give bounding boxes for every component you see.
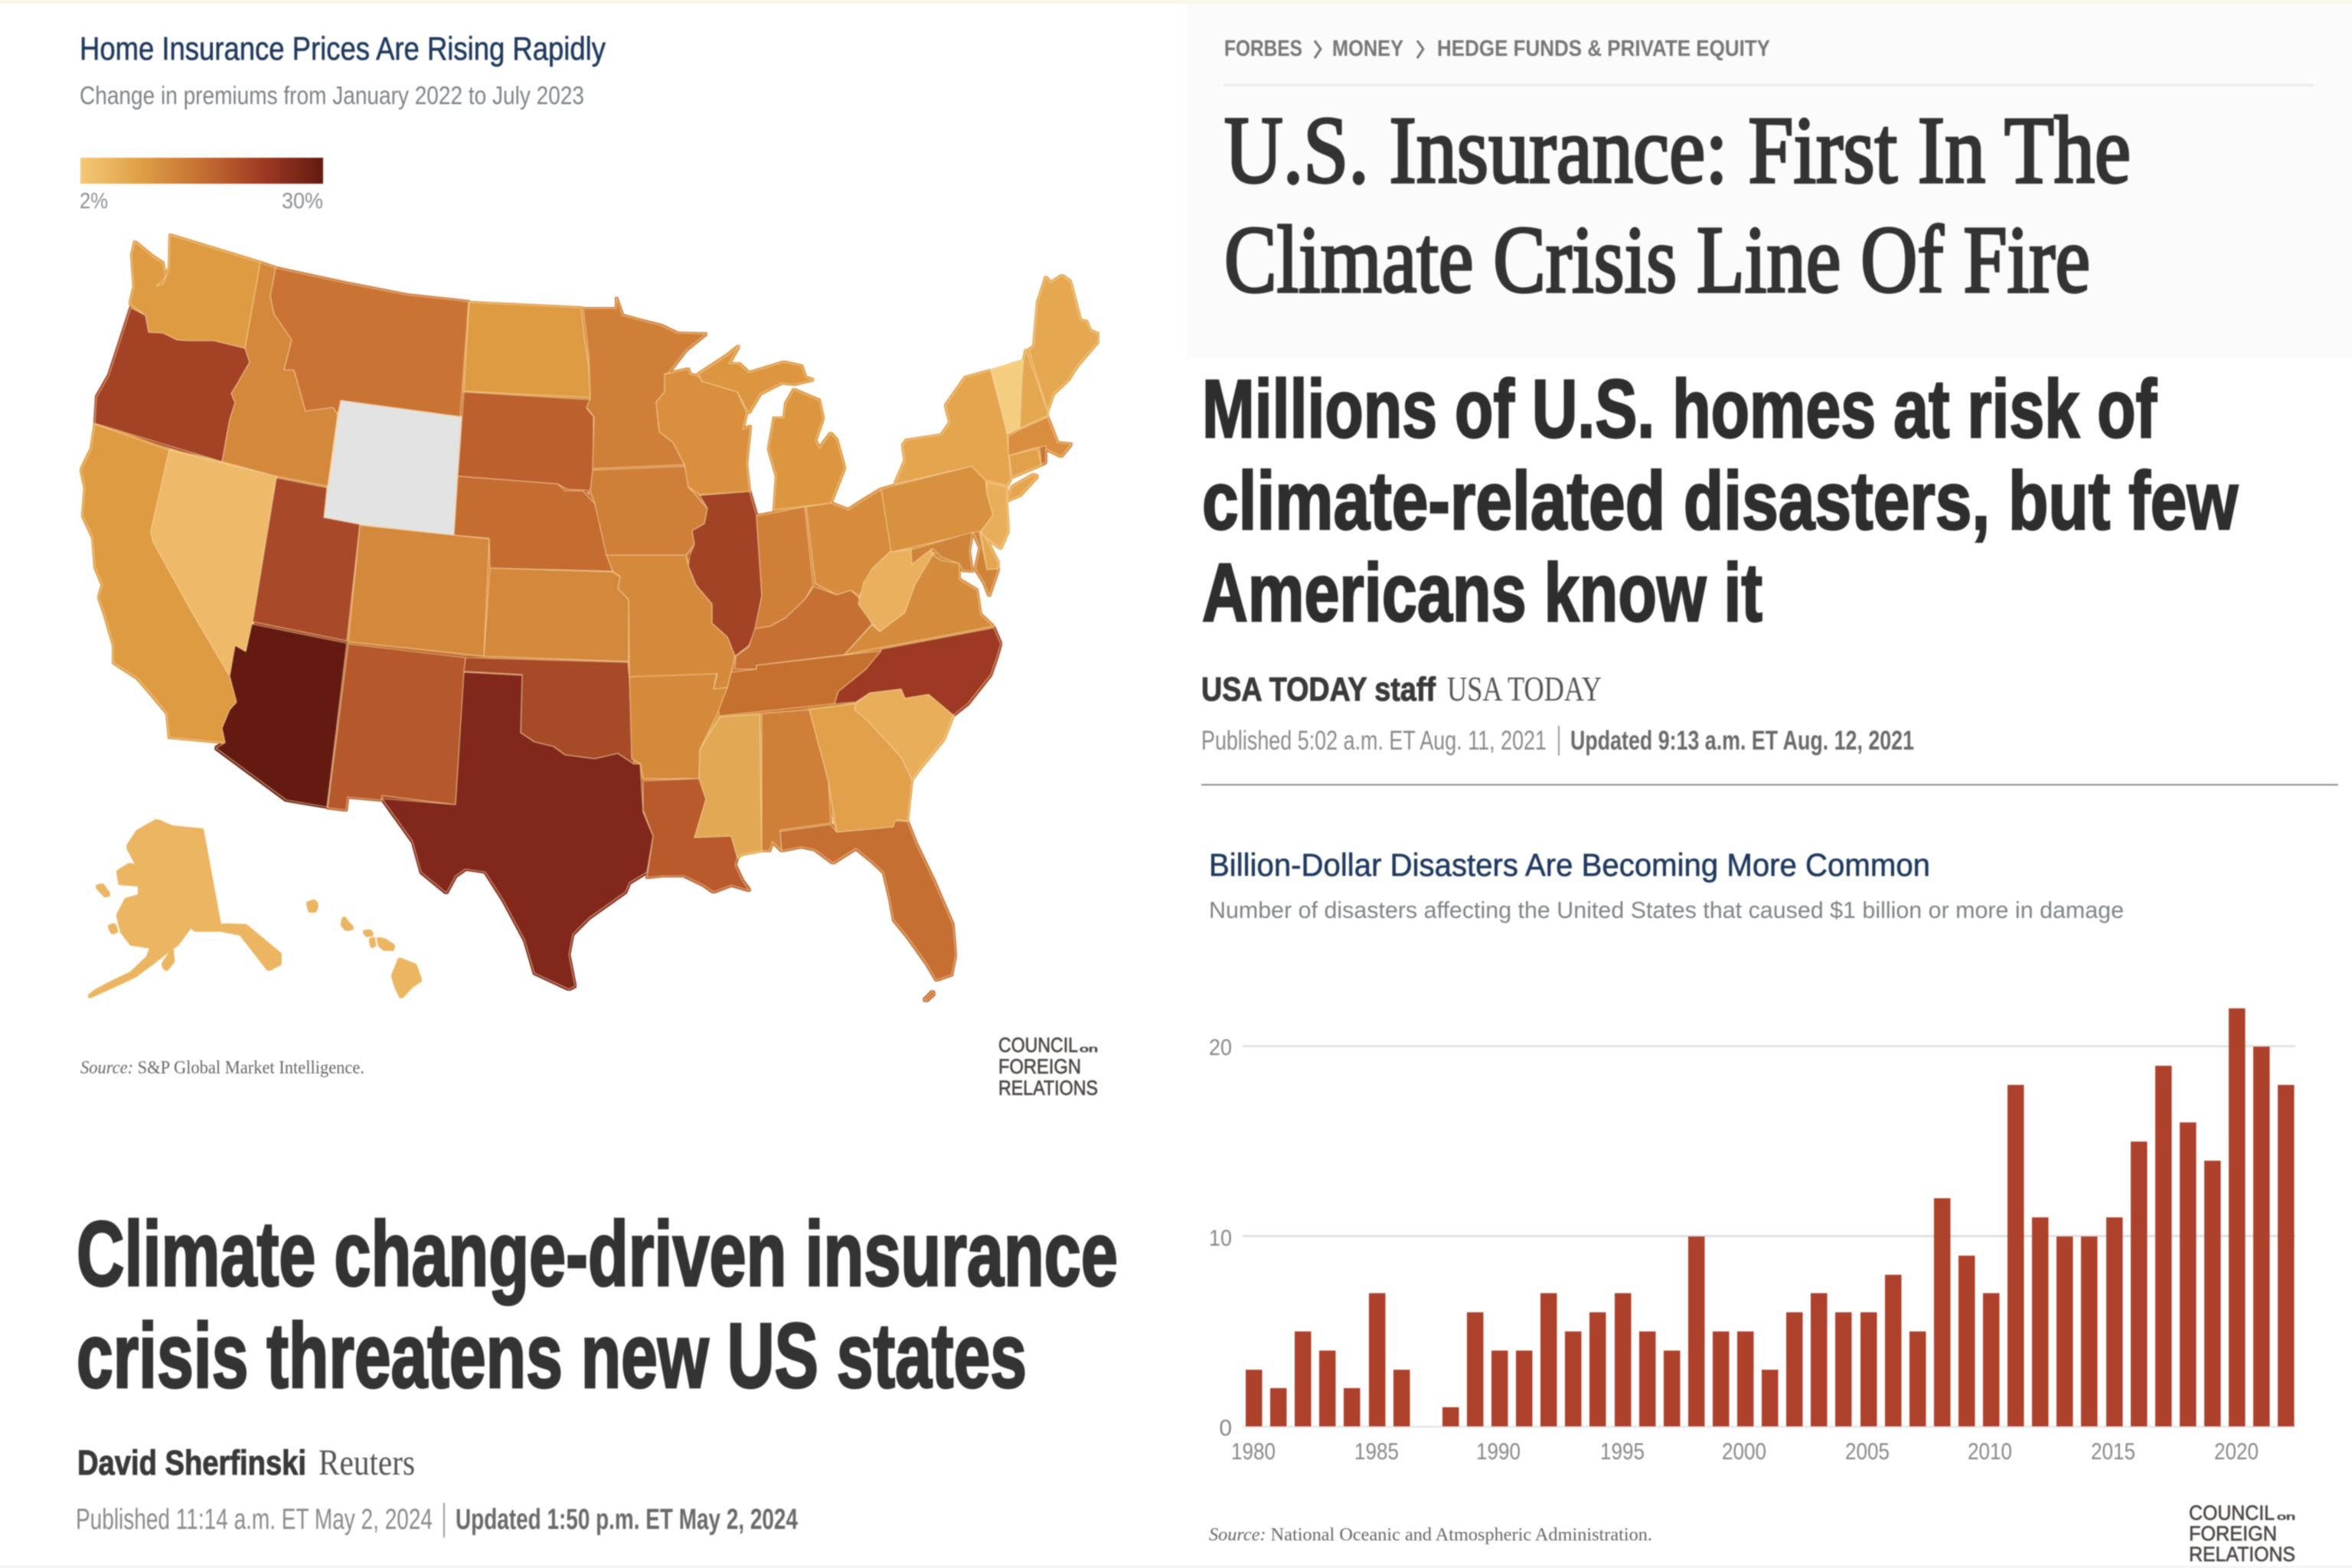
gridlines and y axis: 10 [1209, 1226, 1232, 1251]
x axis year labels: 1985 [1354, 1438, 1399, 1465]
New Hampshire [1020, 350, 1047, 428]
dateline: Published 5:02 a.m. ET Aug. 11, 2021 [1201, 726, 1547, 756]
bar chart [1246, 1008, 2294, 1426]
council on foreign relations logo: COUNCIL [998, 1034, 1078, 1057]
Maine [1029, 276, 1098, 410]
Colorado [348, 525, 489, 656]
council on foreign relations logo: on [1080, 1044, 1098, 1054]
x axis year labels: 2020 [2214, 1438, 2259, 1465]
council on foreign relations logo [998, 1034, 1098, 1099]
council on foreign relations logo: RELATIONS [998, 1076, 1098, 1099]
headline: Climate change-driven insurance [77, 1203, 1118, 1305]
x axis year labels: 2010 [1968, 1438, 2012, 1465]
headline: Americans know it [1202, 546, 1762, 639]
Wisconsin [656, 369, 750, 495]
gridlines and y axis [1209, 1035, 2295, 1441]
council on foreign relations logo [2189, 1501, 2295, 1566]
byline: USA TODAY [1447, 669, 1602, 708]
chart subtitle: Number of disasters affecting the United States that caused $1 billion or more in damage [1209, 897, 2124, 923]
North Dakota [464, 302, 590, 397]
headline [1202, 362, 2239, 639]
colour legend: 2% [80, 189, 108, 214]
dateline: Published 11:14 a.m. ET May 2, 2024 [76, 1504, 433, 1536]
Forbes headline: U.S. Insurance: First In The [1224, 98, 2131, 204]
byline: USA TODAY staff [1201, 671, 1436, 708]
Hawaii [308, 901, 420, 997]
Kentucky [735, 586, 872, 669]
West Virginia [858, 550, 933, 632]
article header: USA Today [1201, 362, 2338, 786]
Arizona [216, 624, 347, 807]
dateline [76, 1503, 798, 1537]
Utah [253, 478, 360, 641]
map subtitle: Change in premiums from January 2022 to July 2023 [80, 81, 584, 109]
Vermont [992, 361, 1024, 433]
map title: Home Insurance Prices Are Rising Rapidly [80, 31, 606, 67]
Tennessee [717, 651, 881, 716]
Montana [270, 268, 469, 416]
gridlines and y axis: 20 [1209, 1035, 1232, 1060]
Georgia [809, 704, 912, 832]
Rhode Island [1040, 446, 1046, 465]
breadcrumb: FORBES [1224, 36, 1302, 61]
Connecticut [1009, 449, 1041, 477]
x axis year labels: 1995 [1600, 1438, 1645, 1465]
choropleth map of U.S. states [81, 235, 1098, 1001]
Washington [130, 235, 260, 348]
Illinois [688, 492, 762, 656]
Florida [780, 821, 956, 1001]
Alabama [762, 710, 831, 851]
map source note: Source: S&P Global Market Intelligence. [80, 1058, 364, 1078]
article header: Reuters climate insurance crisis [76, 1203, 1118, 1537]
council on foreign relations logo: RELATIONS [2189, 1543, 2295, 1566]
byline: David Sherfinski [77, 1443, 306, 1482]
Wyoming [324, 400, 460, 535]
breadcrumb: MONEY [1332, 36, 1403, 61]
Ohio [806, 489, 891, 596]
Alaska [89, 821, 280, 997]
Arkansas [629, 674, 727, 779]
Texas [382, 672, 653, 989]
Forbes headline second line: Climate Crisis Line Of Fire [1224, 207, 2090, 313]
colour legend: 30% [282, 189, 323, 214]
chart title: Billion-Dollar Disasters Are Becoming More Common [1209, 847, 1930, 883]
Louisiana [643, 779, 750, 892]
Oregon [95, 308, 250, 462]
headline second line: crisis threatens new US states [77, 1305, 1027, 1407]
New Jersey [981, 482, 1008, 548]
council on foreign relations logo: FOREIGN [998, 1055, 1081, 1078]
x axis year labels: 1990 [1476, 1438, 1521, 1465]
x axis year labels [1231, 1438, 2259, 1465]
byline: Reuters [318, 1442, 415, 1483]
council on foreign relations logo: on [2277, 1511, 2295, 1522]
Indiana [755, 507, 813, 629]
breadcrumb: HEDGE FUNDS & PRIVATE EQUITY [1437, 36, 1770, 61]
x axis year labels: 2005 [1845, 1438, 1890, 1465]
Maryland [911, 531, 998, 596]
Iowa [590, 466, 707, 555]
Mississippi [694, 714, 762, 858]
dateline: Updated 9:13 a.m. ET Aug. 12, 2021 [1570, 726, 1914, 756]
New Mexico [328, 644, 466, 810]
colour legend [80, 158, 323, 214]
Idaho [222, 263, 338, 486]
South Carolina [854, 689, 953, 779]
council on foreign relations logo: COUNCIL [2189, 1501, 2275, 1524]
Pennsylvania [881, 466, 993, 552]
South Dakota [458, 392, 593, 491]
Michigan [698, 346, 844, 510]
dateline: Updated 1:50 p.m. ET May 2, 2024 [456, 1504, 798, 1536]
Kansas [484, 568, 629, 662]
panel: billion-dollar disasters chart [1209, 847, 2295, 1566]
x axis year labels: 1980 [1231, 1438, 1276, 1465]
Massachusetts [1008, 417, 1071, 456]
x axis year labels: 2000 [1722, 1438, 1766, 1465]
California [81, 424, 237, 743]
gridlines and y axis: 0 [1219, 1416, 1232, 1441]
Minnesota [583, 298, 706, 469]
Nebraska [454, 476, 612, 571]
chart source note: Source: National Oceanic and Atmospheric Administration. [1209, 1525, 1652, 1545]
dateline [1201, 726, 1914, 756]
breadcrumb [1224, 36, 1770, 61]
Nevada [151, 450, 276, 676]
Virginia [844, 555, 993, 655]
article header: Forbes [1187, 5, 2352, 358]
North Carolina [835, 628, 1001, 715]
New York [895, 371, 1037, 501]
byline [1201, 669, 1602, 708]
Oklahoma [464, 658, 634, 764]
panel: home insurance price map [80, 31, 1098, 1099]
x axis year labels: 2015 [2091, 1438, 2135, 1465]
Missouri [606, 555, 735, 689]
Delaware [981, 531, 998, 570]
council on foreign relations logo: FOREIGN [2189, 1522, 2277, 1545]
